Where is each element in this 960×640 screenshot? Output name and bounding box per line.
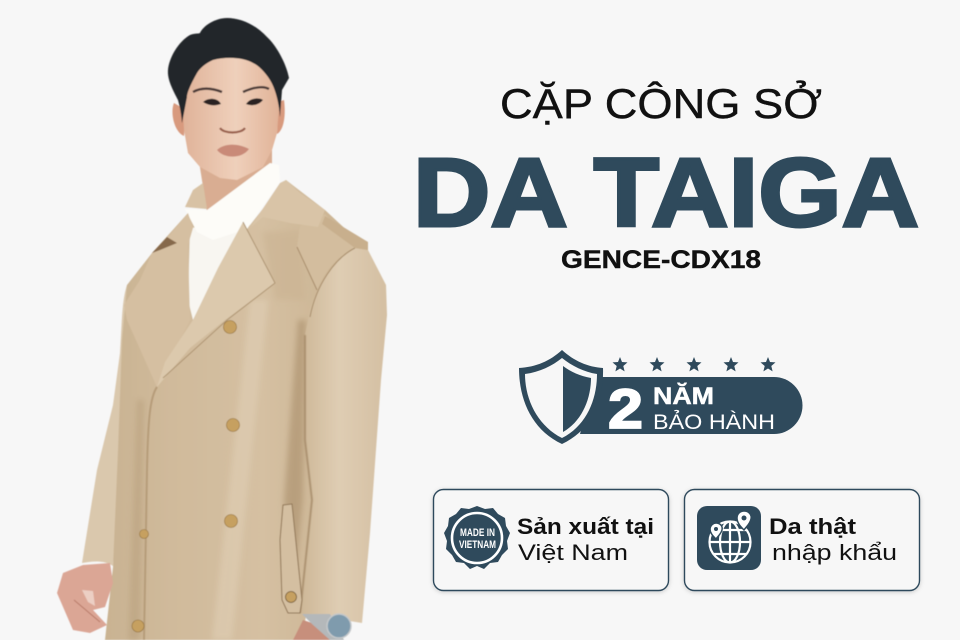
shoulder panel bbox=[297, 214, 355, 290]
hair bbox=[168, 18, 289, 123]
icon: made in Vietnam seal: MADE IN bbox=[460, 527, 495, 539]
rating stars bbox=[612, 357, 776, 371]
sleeve seam bbox=[297, 247, 355, 317]
card: Da thật nhập khẩu bbox=[684, 490, 920, 590]
coat shading bbox=[128, 230, 306, 640]
icon: made in Vietnam seal bbox=[444, 506, 510, 569]
number 2: 2 bbox=[608, 377, 643, 440]
icon: shield bbox=[519, 350, 603, 444]
warranty badge bbox=[519, 350, 802, 444]
product code: GENCE-CDX18 bbox=[561, 246, 761, 274]
label: NĂM: NĂM bbox=[653, 382, 714, 410]
nose bbox=[220, 128, 245, 132]
card text regular: nhập khẩu bbox=[772, 540, 897, 565]
coat buttons bbox=[132, 320, 292, 632]
photo: man in beige trench coat bbox=[57, 18, 387, 640]
left hand bbox=[57, 563, 113, 633]
back collar left bbox=[185, 183, 207, 209]
right sleeve bbox=[300, 248, 387, 623]
neck bbox=[198, 145, 272, 212]
white turtleneck collar bbox=[185, 163, 280, 240]
shoulder epaulet bbox=[322, 216, 368, 250]
pocket flap bbox=[280, 504, 302, 613]
icon: made in Vietnam seal: VIETNAM bbox=[459, 539, 496, 551]
right hand bbox=[293, 620, 343, 640]
wristwatch bbox=[302, 614, 351, 640]
card text bold: Da thật bbox=[769, 514, 857, 539]
left lapel bbox=[124, 213, 193, 387]
heading: DA TAIGA: DA TAIGA bbox=[413, 138, 919, 247]
card: Sản xuất tại Việt Nam bbox=[434, 490, 668, 590]
white shirt bbox=[188, 222, 247, 320]
right lapel bbox=[157, 222, 275, 387]
left sleeve bbox=[82, 270, 150, 566]
card text regular: Việt Nam bbox=[518, 540, 628, 565]
heading: CẶP CÔNG SỞ: CẶP CÔNG SỞ bbox=[500, 79, 822, 127]
warranty pill bbox=[580, 377, 802, 434]
ears bbox=[172, 100, 285, 136]
icon: globe with pins bbox=[697, 506, 761, 570]
lips bbox=[217, 145, 249, 157]
front placket line bbox=[144, 387, 157, 640]
eyes bbox=[203, 98, 263, 105]
label: BẢO HÀNH: BẢO HÀNH bbox=[653, 411, 775, 434]
pocket button bbox=[286, 592, 296, 602]
eyebrows bbox=[193, 87, 269, 92]
face bbox=[182, 50, 280, 180]
back collar right bbox=[250, 180, 325, 228]
card text bold: Sản xuất tại bbox=[517, 514, 654, 539]
coat body bbox=[105, 180, 368, 640]
